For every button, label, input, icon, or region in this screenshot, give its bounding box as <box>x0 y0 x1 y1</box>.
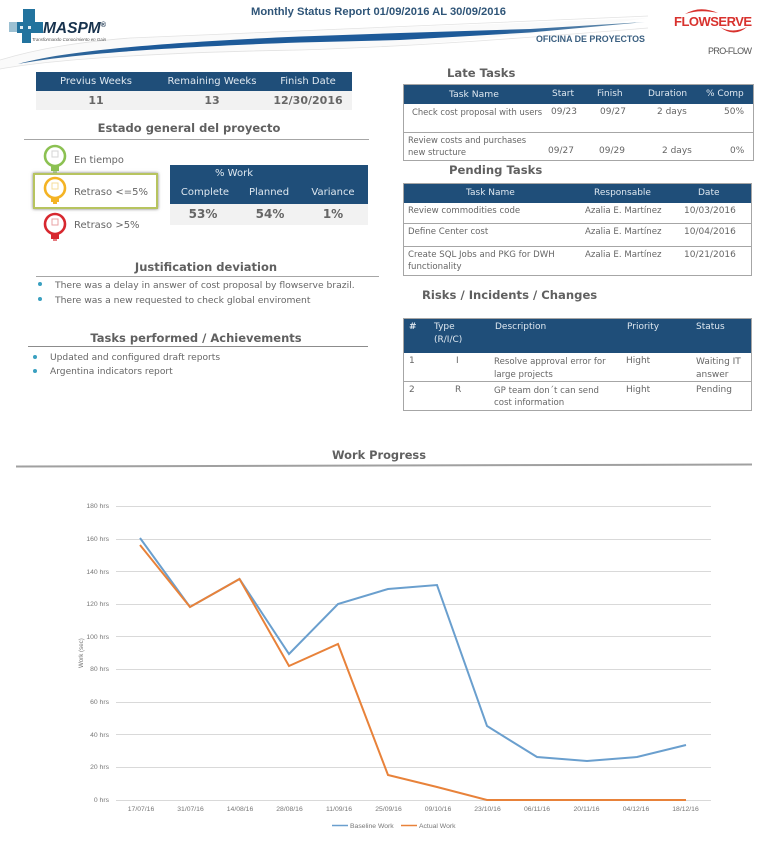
Retraso >5% label: Retraso >5% <box>74 220 140 231</box>
row 3 task: Create SQL Jobs and PKG for DWH <box>408 250 555 260</box>
row 1 description: large projects <box>494 370 553 380</box>
x axis labels: 18/12/16 <box>672 806 699 813</box>
x axis labels: 25/09/16 <box>375 806 402 813</box>
y axis labels: 60 hrs <box>90 699 110 706</box>
row 3 owner: Azalia E. Martínez <box>585 250 662 260</box>
baseline work line <box>140 538 686 761</box>
Responsable column: Responsable <box>594 188 651 198</box>
y axis labels: 140 hrs <box>86 569 110 576</box>
row 1 task: Review commodities code <box>408 206 520 216</box>
percent work header <box>170 165 368 204</box>
row 2 number: 2 <box>409 385 415 395</box>
Task Name column: Task Name <box>449 89 499 100</box>
row 1 status: answer <box>696 370 729 380</box>
Flowserve wordmark: FLOWSERVE <box>674 14 752 29</box>
pending header <box>404 184 751 203</box>
row 1 start: 09/23 <box>551 107 577 117</box>
row 2 finish: 09/29 <box>599 146 625 156</box>
Task Name column: Task Name <box>466 188 515 198</box>
row 2 duration: 2 days <box>662 146 692 156</box>
row 2 start: 09/27 <box>548 146 574 156</box>
y axis labels: 0 hrs <box>94 797 110 804</box>
Previus Weeks value: 11 <box>88 94 104 107</box>
row 1 number: 1 <box>409 356 415 366</box>
x axis labels: 17/07/16 <box>128 806 154 813</box>
row 1 task: Check cost proposal with users <box>412 107 542 117</box>
row 1 owner: Azalia E. Martínez <box>585 206 662 216</box>
panel: percent work <box>170 165 368 225</box>
logo: Flowserve <box>674 9 752 32</box>
% Work label: % Work <box>215 168 253 179</box>
row 1 duration: 2 days <box>657 107 687 117</box>
y axis labels: 100 hrs <box>86 634 110 641</box>
row 2 priority: Hight <box>626 385 650 395</box>
text: justification list <box>38 280 355 306</box>
heading: Risks: Risks / Incidents / Changes <box>422 288 597 302</box>
risks header <box>404 319 751 353</box>
row 1 finish: 09/27 <box>600 107 626 117</box>
icon: yellow bulb <box>44 176 66 204</box>
row 2 task: Define Center cost <box>408 227 488 237</box>
row 2 status: Pending <box>696 385 732 395</box>
achievement item 1: Updated and configured draft reports <box>50 353 220 363</box>
row 2 owner: Azalia E. Martínez <box>585 227 662 237</box>
row 1 status: Waiting IT <box>696 357 741 367</box>
Priority column: Priority <box>627 322 659 332</box>
x axis labels: 20/11/16 <box>574 806 600 813</box>
y axis labels: 160 hrs <box>86 536 110 543</box>
bullet <box>33 369 37 373</box>
percent work values band <box>170 204 368 225</box>
x axis labels: 28/08/16 <box>276 806 303 813</box>
row 2 description: GP team don´t can send <box>494 386 599 396</box>
y axis labels: 20 hrs <box>90 764 110 771</box>
legend: Actual Work <box>419 823 456 830</box>
justification item 2: There was a new requested to check global enviroment <box>55 295 310 306</box>
Planned label: Planned <box>249 187 289 198</box>
bullet <box>38 297 42 301</box>
row 3 date: 10/21/2016 <box>684 250 736 260</box>
Finish column: Finish <box>597 89 623 99</box>
icon: MASPM cross <box>9 9 43 43</box>
y axis labels: 80 hrs <box>90 666 110 673</box>
heading: Work Progress: Work Progress <box>332 448 426 462</box>
Finish Date label: Finish Date <box>280 76 336 87</box>
row 1 type: I <box>456 356 459 366</box>
Retraso <=5% label: Retraso <=5% <box>74 187 148 198</box>
divider swoosh <box>16 464 752 468</box>
Type column <box>434 322 462 345</box>
Date column: Date <box>698 188 720 198</box>
Start column: Start <box>552 89 574 99</box>
y axis labels: 180 hrs <box>86 503 110 510</box>
row 1 description: Resolve approval error for <box>494 357 606 367</box>
Remaining Weeks value: 13 <box>204 94 220 107</box>
title: Monthly Status Report 01/09/2016 AL 30/09/2016 <box>251 6 506 18</box>
heading: Late Tasks: Late Tasks <box>447 66 515 80</box>
selected status highlight <box>33 173 158 209</box>
chart: work progress <box>78 503 711 830</box>
x axis labels: 14/08/16 <box>227 806 253 813</box>
legend: Baseline Work <box>350 823 394 830</box>
row 3 task: functionality <box>408 262 462 272</box>
text: achievements list <box>33 353 220 377</box>
Variance label: Variance <box>311 187 355 198</box>
row 1 priority: Hight <box>626 356 650 366</box>
% Comp column: % Comp <box>706 89 744 99</box>
MASPM wordmark: MASPM® <box>43 20 106 37</box>
row 1 description <box>494 357 606 380</box>
row 2 task: new structure <box>408 147 466 157</box>
table: late tasks <box>403 84 754 161</box>
Variance value: 1% <box>323 207 343 221</box>
icon: green bulb <box>44 144 66 173</box>
row 1 percent: 50% <box>724 107 744 117</box>
Description column: Description <box>495 322 546 332</box>
row 3 task <box>408 250 555 272</box>
achievement item 2: Argentina indicators report <box>50 367 173 377</box>
Flowserve arcs <box>685 9 747 32</box>
Complete label: Complete <box>181 187 229 198</box>
x axis labels: 23/10/16 <box>474 806 501 813</box>
row 2 description <box>494 386 599 408</box>
row 2 description: cost information <box>494 398 564 408</box>
Type column: (R/I/C) <box>434 335 462 345</box>
legend <box>332 823 456 830</box>
row 2 task <box>408 135 526 157</box>
heading: Justification deviation: Justification deviation <box>135 260 277 274</box>
Remaining Weeks label: Remaining Weeks <box>168 76 256 87</box>
y axis labels <box>86 503 110 804</box>
office label: OFICINA DE PROYECTOS <box>536 34 645 44</box>
Planned value: 54% <box>256 207 284 221</box>
MASPM tagline: Transformando Conocimiento en Gain <box>32 37 106 42</box>
y axis title: Work (sec) <box>78 638 85 668</box>
bullet <box>38 282 42 286</box>
x axis labels: 04/12/16 <box>623 806 649 813</box>
Finish Date value: 12/30/2016 <box>273 94 343 107</box>
table: pending tasks <box>403 183 752 276</box>
weeks header <box>36 72 352 91</box>
weeks values band <box>36 91 352 110</box>
y axis labels: 40 hrs <box>90 732 110 739</box>
En tiempo label: En tiempo <box>74 155 124 166</box>
pro-flow label: PRO-FLOW <box>708 46 751 56</box>
Type column: Type <box>434 322 455 332</box>
row 2 task: Review costs and purchases <box>408 135 526 145</box>
heading: Estado general: Estado general del proyecto <box>98 121 280 135</box>
Status column: Status <box>696 322 725 332</box>
x axis labels: 31/07/16 <box>177 806 204 813</box>
late tasks header <box>404 85 753 104</box>
row 2 date: 10/04/2016 <box>684 227 736 237</box>
bullet <box>33 355 37 359</box>
Duration column: Duration <box>648 89 687 99</box>
actual work line <box>140 545 686 800</box>
header swoosh <box>0 16 648 70</box>
panel: status legend <box>30 144 160 241</box>
Previus Weeks label: Previus Weeks <box>60 76 132 87</box>
x axis labels: 09/10/16 <box>425 806 451 813</box>
heading: Pending Tasks: Pending Tasks <box>449 163 542 177</box>
x axis labels <box>128 806 699 813</box>
x axis labels: 06/11/16 <box>524 806 550 813</box>
panel: weeks summary <box>36 72 352 110</box>
justification item 1: There was a delay in answer of cost proposal by flowserve brazil. <box>55 280 355 291</box>
icon: red bulb <box>44 212 66 241</box>
table: risks <box>403 318 752 411</box>
row 1 status <box>696 357 741 380</box>
x axis labels: 11/09/16 <box>326 806 352 813</box>
row 1 date: 10/03/2016 <box>684 206 736 216</box>
row 2 percent: 0% <box>730 146 744 156</box>
logo: MASPM <box>9 9 106 43</box>
row 2 type: R <box>455 385 461 395</box>
# column: # <box>409 322 417 332</box>
y axis labels: 120 hrs <box>86 601 110 608</box>
heading: Tasks performed: Tasks performed / Achievements <box>90 331 302 345</box>
Complete value: 53% <box>189 207 217 221</box>
